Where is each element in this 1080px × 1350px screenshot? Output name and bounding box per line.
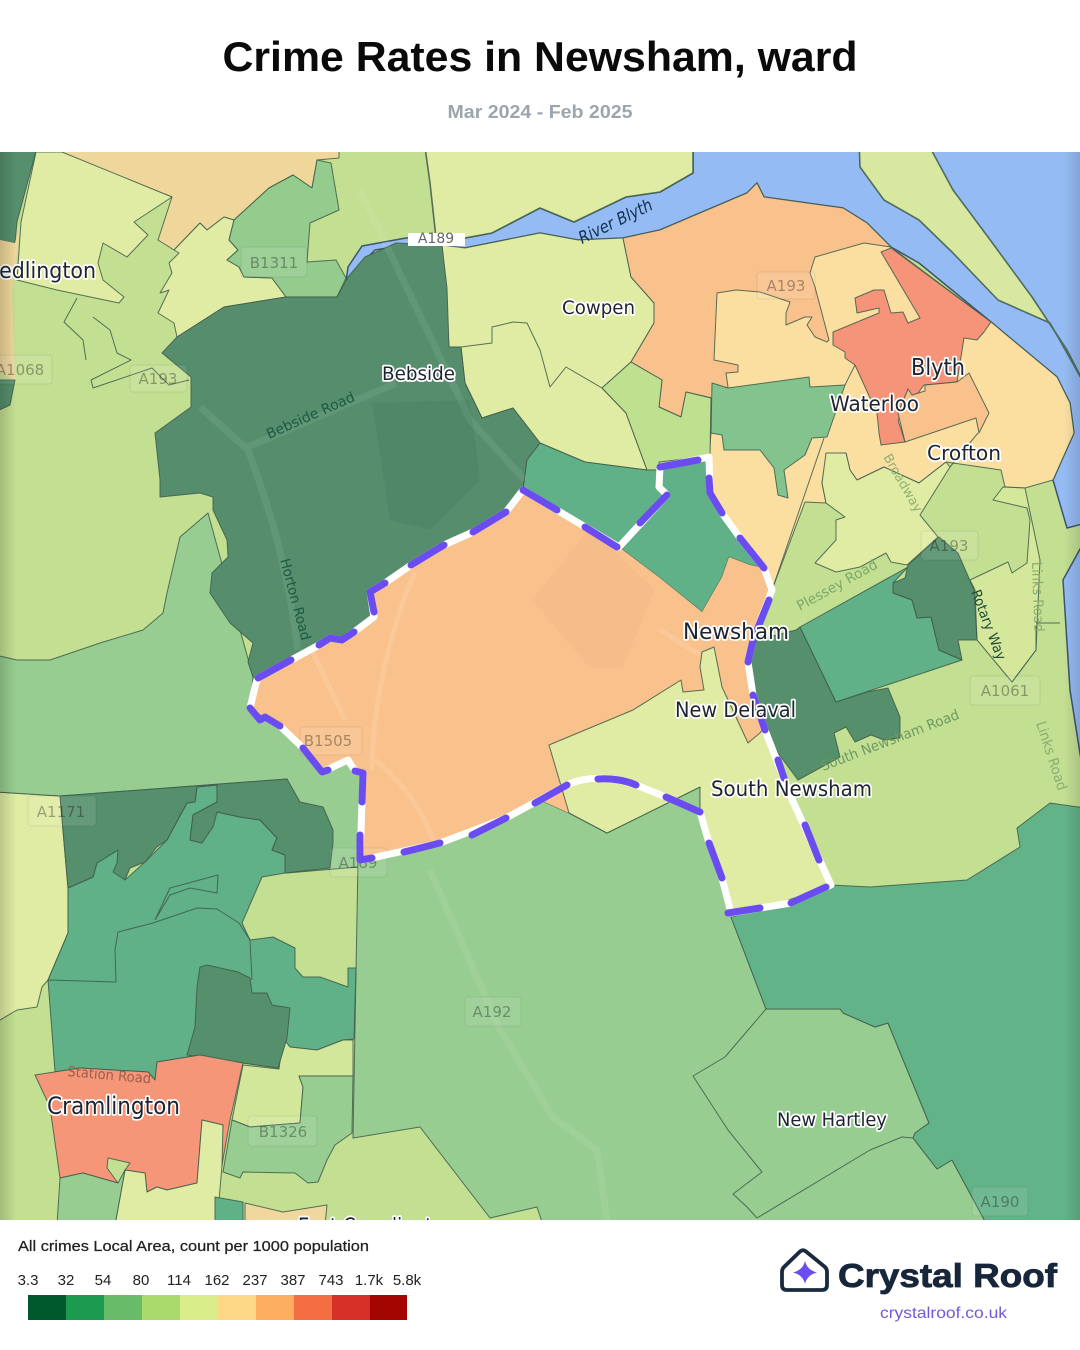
place labels: New Delaval xyxy=(675,698,796,722)
legend value labels: 114 xyxy=(167,1272,191,1289)
area: mid green Waterloo xyxy=(711,377,845,498)
area: green north of ward 2 xyxy=(619,457,764,612)
legend title: All crimes Local Area, count per 1000 population xyxy=(18,1238,369,1255)
place labels: Newsham xyxy=(683,620,789,645)
area: mid green B1326 xyxy=(223,1076,353,1183)
road names: Horton Road xyxy=(276,557,313,642)
legend xyxy=(18,1238,422,1320)
area: orange north Blyth xyxy=(623,183,891,417)
legend value labels: 1.7k xyxy=(355,1272,384,1289)
logo wordmark: Crystal Roof xyxy=(838,1257,1058,1294)
ward boundary: purple dashes xyxy=(250,460,826,913)
label: River Blyth: River Blyth xyxy=(575,195,656,248)
area: green north of ward 1 xyxy=(523,443,667,547)
area: pale green south of Cramlington centre xyxy=(232,1038,353,1127)
area: pale below Cramlington xyxy=(115,1120,223,1225)
road names: Links Road xyxy=(1032,719,1070,793)
area: left yellow xyxy=(0,792,68,1023)
footer background xyxy=(0,1220,1080,1350)
road names xyxy=(67,389,1070,1087)
place labels: South Newsham xyxy=(711,777,872,801)
Bebside darker patch xyxy=(372,400,480,530)
road shield labels: A189 xyxy=(339,854,377,872)
water: River Blyth and sea xyxy=(344,140,1080,785)
area: pale orange north xyxy=(64,152,340,250)
legend value labels: 54 xyxy=(95,1272,111,1289)
area: dark green south east xyxy=(731,803,1080,1225)
area: ward orange Newsham xyxy=(250,490,772,860)
road names: Rotary Way xyxy=(967,588,1009,663)
area: top left dark xyxy=(0,152,36,243)
area: pale orange bottom xyxy=(245,1203,327,1225)
road shield labels: A192 xyxy=(473,1003,511,1021)
road names: Links Road xyxy=(1028,562,1046,632)
legend value labels: 80 xyxy=(133,1272,149,1289)
road names: Bebside Road xyxy=(264,389,357,443)
road names: Plessey Road xyxy=(794,557,881,614)
road shield labels: A193 xyxy=(139,370,177,388)
ward orange darker field xyxy=(532,528,655,668)
legend value labels: 3.3 xyxy=(18,1272,38,1289)
road shields xyxy=(0,247,1040,1216)
road shield labels: B1311 xyxy=(250,254,298,272)
area: mid green B1311 xyxy=(227,160,346,297)
place labels: Crofton xyxy=(927,441,1001,465)
area: pale pocket east xyxy=(970,487,1040,682)
subtitle: date range: Mar 2024 - Feb 2025 xyxy=(448,102,632,122)
road names: Station Road xyxy=(67,1064,152,1087)
area: orange Blyth block xyxy=(898,373,989,442)
legend value labels: 387 xyxy=(280,1272,306,1289)
roads on map xyxy=(200,190,607,1220)
land: north bank xyxy=(424,152,694,239)
road shield labels: A1171 xyxy=(37,803,85,821)
area: mid green south west xyxy=(57,1170,125,1225)
area: pale orange strip west xyxy=(0,222,21,380)
area: yellow-green Crofton south xyxy=(815,453,950,572)
area: red Cramlington xyxy=(35,1055,243,1192)
area: Cowpen pale yellow-green xyxy=(442,233,654,470)
place labels: East Cramlington xyxy=(298,1215,455,1240)
legend value labels: 5.8k xyxy=(393,1272,422,1289)
icon: house with star xyxy=(782,1250,827,1290)
area: red Blyth xyxy=(833,248,991,445)
road shield labels: A190 xyxy=(981,1193,1019,1211)
area: mid green west xyxy=(0,513,363,873)
area: yellow-green New Delaval and South Newsham xyxy=(549,647,831,913)
thin boundary lines xyxy=(64,298,1060,682)
place labels: Cramlington xyxy=(47,1092,180,1120)
area: dark green Bebside xyxy=(155,243,540,678)
map edge shading xyxy=(0,152,1080,1220)
logo: Crystal Roof xyxy=(782,1250,1058,1322)
area: green Plessey block xyxy=(800,567,962,702)
road shield labels: B1326 xyxy=(259,1123,307,1141)
area: dark green Newsham east xyxy=(750,627,900,780)
area: dark blob west xyxy=(0,380,15,412)
road names: South Newsham Road xyxy=(819,707,962,775)
road shield labels: A193 xyxy=(930,537,968,555)
place labels: Blyth xyxy=(911,355,965,381)
place labels: Waterloo xyxy=(830,392,919,416)
road shield labels xyxy=(0,254,1029,1211)
area: mid green south xyxy=(353,787,987,1225)
place labels: New Hartley xyxy=(777,1109,887,1131)
legend value labels: 162 xyxy=(204,1272,230,1289)
area: yellow-green north west xyxy=(17,152,172,303)
area: light green Cowpen south xyxy=(602,362,711,470)
ward internal roads xyxy=(313,572,700,848)
legend colour scale xyxy=(28,1295,407,1320)
logo url: crystalroof.co.uk xyxy=(880,1305,1008,1322)
road shield labels: A1061 xyxy=(981,682,1029,700)
area: yellow-green north centre xyxy=(158,217,286,337)
road shield labels: B1505 xyxy=(304,732,352,750)
place labels xyxy=(0,259,1001,1240)
road shield labels: A193 xyxy=(767,277,805,295)
land: east spit across river xyxy=(859,140,1080,385)
legend value labels: 32 xyxy=(58,1272,74,1289)
legend value labels: 743 xyxy=(318,1272,344,1289)
area: Cramlington green xyxy=(48,785,356,1080)
New Hartley boundary lines xyxy=(693,1009,913,1218)
road shield: A189 bridge: A189 xyxy=(418,231,454,247)
place labels: Bebside xyxy=(382,363,455,385)
ward boundary: white underlay xyxy=(250,457,831,913)
road shield: A189 bridge xyxy=(408,231,465,247)
area: pale orange Blyth xyxy=(709,230,1074,590)
place labels: Cowpen xyxy=(562,297,635,319)
title: Crime Rates in Newsham, ward xyxy=(222,33,858,80)
area: dark green Cramlington centre xyxy=(187,965,290,1068)
legend value labels: 237 xyxy=(242,1272,268,1289)
area: green bottom xyxy=(215,1197,243,1225)
area: dark green Cramlington north xyxy=(60,779,333,888)
area: dark green A193 xyxy=(893,537,977,660)
road names: Broadway xyxy=(880,452,925,516)
legend value labels xyxy=(18,1272,422,1289)
